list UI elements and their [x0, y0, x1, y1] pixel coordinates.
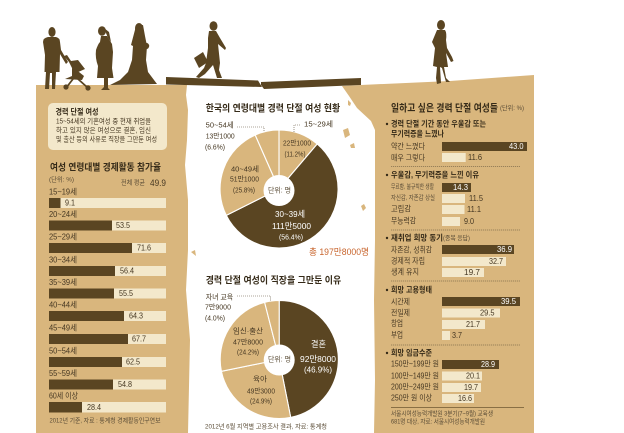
overall average: 49.9: [150, 178, 166, 188]
section: reasons for depression: [386, 170, 484, 226]
source note: 681명 대상, 자료: 서울시여성능력개발원: [391, 416, 485, 426]
section: reasons for depression: 11.5: [469, 194, 484, 203]
section: desired wage: 200만~249만 원: [391, 382, 439, 392]
label: 30-39: 30~39세: [275, 209, 305, 219]
section: felt depression: 무기력증을 느꼈나: [391, 128, 445, 138]
section: desired employment type: 3.7: [452, 331, 462, 340]
heading: status by age: 한국의 연령대별 경력 단절 여성 현황: [206, 102, 340, 114]
section: desired wage: 희망 임금수준: [391, 348, 433, 358]
section: desired wage: 250만 원 이상: [391, 392, 433, 402]
bar chart: age groups: 9.1: [65, 198, 75, 208]
bar chart: age groups: 28.4: [87, 403, 101, 412]
bar chart: age groups: 45~49세: [49, 324, 77, 332]
section: desired employment type: 부업: [391, 330, 403, 340]
section: reasons for depression: 자신감, 자존감 상실: [391, 192, 435, 202]
section: desired wage: [386, 348, 499, 403]
bar chart: age groups: 67.7: [132, 334, 146, 344]
section: reasons for depression: 무능력감: [391, 216, 417, 226]
panel: female economic participation by age: [49, 162, 166, 424]
panel: career-break women by age: [205, 102, 369, 257]
bar chart: age groups: 55.5: [119, 289, 133, 298]
bar chart: age groups: 55~59세: [49, 369, 77, 378]
leader line: [237, 296, 270, 301]
bar chart: age groups: 15~19세: [49, 188, 77, 196]
section: motivation to rejoin: 32.7: [489, 257, 503, 266]
section: felt depression: 11.6: [468, 153, 483, 162]
label: child education: [205, 292, 233, 322]
label: 30-39: [272, 209, 311, 242]
bar chart: age groups: 30~34세: [49, 256, 77, 264]
section: motivation to rejoin: (중복 응답): [443, 234, 470, 242]
label: pregnancy and birth: 47만8000: [233, 338, 263, 346]
label: childcare: 49만3000: [247, 386, 275, 396]
label: 50-54: 13만1000: [206, 132, 235, 140]
section: felt depression: [386, 118, 527, 162]
icon: bride silhouette: [110, 23, 157, 85]
label: 30-39: (56.4%): [279, 232, 303, 242]
label: 30-39: 111만5000: [272, 221, 311, 231]
label: childcare: 육아: [253, 374, 267, 384]
source note: 2012년 기준, 자료 : 통계청 경제활동인구연보: [50, 416, 161, 424]
section: desired wage: 150만~199만 원: [391, 360, 439, 368]
label: 40-49: (25.8%): [233, 186, 255, 194]
overall average: 전체 평균: [121, 178, 145, 186]
bar chart: age groups: 25~29세: [49, 232, 77, 242]
bar chart: age groups: 53.5: [116, 221, 130, 230]
definition text: 및 출산 등의 사유로 직장을 그만둔 여성: [56, 134, 157, 144]
background: left ground panel: [36, 85, 190, 433]
section: desired employment type: 희망 고용형태: [391, 284, 432, 294]
bar chart: age groups: 20~24세: [49, 210, 77, 219]
label: marriage: [300, 339, 336, 374]
section: felt depression: 약간 느꼈다: [391, 141, 426, 151]
section: desired wage: 19.7: [464, 383, 478, 392]
section: felt depression: 경력 단절 기간 동안 우울감 또는: [391, 118, 487, 128]
section: motivation to rejoin: [386, 232, 514, 277]
label: 40-49: 40~49세: [231, 164, 259, 174]
section: desired wage: 100만~149만 원: [391, 372, 439, 380]
label: 40-49: [230, 164, 259, 194]
label: child education: 7만9000: [205, 302, 231, 312]
bar chart: age groups: 64.3: [129, 312, 143, 320]
bar chart: age groups: 50~54세: [49, 346, 77, 356]
heading: want to work: 일하고 싶은 경력 단절 여성들: [391, 102, 498, 114]
section: desired employment type: 29.5: [480, 308, 495, 318]
heading: reasons: 경력 단절 여성이 직장을 그만둔 이유: [206, 274, 341, 286]
section: felt depression: 매우 그렇다: [391, 152, 426, 162]
definition text: [56, 116, 157, 144]
bar chart: age groups: 35~39세: [49, 278, 77, 287]
bar chart: age groups: 71.6: [137, 244, 151, 252]
section: reasons for depression: 11.1: [467, 205, 482, 214]
source note: 서울시여성능력개발원 3분기(7~9월) 교육생: [391, 408, 493, 418]
section: reasons for depression: 9.0: [464, 217, 474, 226]
section: felt depression: 43.0: [509, 142, 524, 151]
section: desired employment type: 전일제: [391, 308, 410, 318]
section: reasons for depression: 우울감, 무기력증을 느낀 이유: [391, 170, 480, 180]
section: motivation to rejoin: 생계 유지: [391, 266, 419, 276]
unit label: (단위: %): [49, 174, 74, 184]
label: child education: (4.0%): [205, 314, 225, 322]
section: motivation to rejoin: 경제적 자립: [391, 256, 425, 266]
label: 15-29: (11.2%): [284, 150, 306, 158]
icon: pregnant woman silhouette: [96, 26, 114, 90]
source note: 2012년 6월 지역별 고용조사 결과, 자료: 통계청: [205, 422, 327, 430]
label: 15-29: 15~29세: [304, 120, 333, 128]
definition text: 하고 있지 않은 여성으로 결혼, 임신: [56, 126, 151, 134]
label: pregnancy and birth: 임신·출산: [233, 326, 263, 336]
label: 15-29: 22만1000: [283, 138, 311, 148]
label: childcare: [247, 374, 275, 406]
section: desired wage: 16.6: [458, 394, 472, 403]
section: desired wage: 20.1: [466, 372, 480, 380]
total callout: 총 197만8000명: [309, 247, 369, 257]
section: desired employment type: 창업: [391, 319, 403, 328]
label: 15-29: [283, 120, 333, 158]
unit label: (단위: %): [500, 103, 524, 112]
section: desired wage: 28.9: [481, 360, 495, 369]
silhouettes: life stages: [43, 20, 454, 91]
label: pregnancy and birth: (24.2%): [237, 348, 259, 356]
section: reasons for depression: 14.3: [453, 183, 469, 192]
overall average: [121, 178, 166, 188]
label: 40-49: 51만1000: [230, 174, 259, 184]
section: desired employment type: 시간제: [391, 296, 410, 306]
bar chart: age groups: 62.5: [126, 358, 140, 366]
label: 50-54: [205, 120, 235, 152]
section: reasons for depression: 고립감: [391, 204, 412, 214]
bar chart: age groups: 40~44세: [49, 300, 77, 310]
panel: women who want to work: [386, 102, 527, 426]
heading: participation rate: 여성 연령대별 경제활동 참가율: [50, 162, 161, 174]
section: reasons for depression: 무료함, 불규칙한 생활: [391, 182, 434, 190]
bar chart: age groups: 54.8: [118, 380, 132, 389]
section: motivation to rejoin: 재취업 희망 동기: [391, 232, 443, 242]
pie chart: reasons: [220, 300, 338, 419]
bar chart: age groups: [49, 188, 166, 412]
definition box: [48, 103, 167, 150]
label: 50-54: (6.6%): [205, 142, 225, 152]
section: desired employment type: 39.5: [501, 297, 517, 306]
label: childcare: (24.9%): [250, 396, 272, 406]
section: motivation to rejoin: 19.7: [464, 268, 481, 277]
label: pregnancy and birth: [233, 326, 263, 356]
definition heading: 경력 단절 여성: [56, 106, 98, 116]
background: right ground panel: [191, 75, 534, 433]
label: marriage: 결혼: [311, 339, 326, 349]
label: child education: 자녀 교육: [206, 292, 233, 302]
label: marriage: (46.9%): [304, 366, 332, 374]
label: marriage: 92만8000: [300, 354, 336, 364]
panel: reasons for leaving work: [205, 274, 341, 430]
icon: stroller: [63, 55, 91, 91]
broken plank: [166, 77, 361, 89]
section: motivation to rejoin: 자존감, 성취감: [391, 244, 433, 254]
section: desired employment type: [386, 284, 520, 340]
center label: 단위: 명: [268, 354, 291, 364]
bar chart: age groups: 60세 이상: [49, 390, 79, 400]
icon: walking woman with bag: [194, 21, 226, 78]
label: 50-54: 50~54세: [206, 120, 234, 130]
bar chart: age groups: 56.4: [120, 266, 134, 276]
section: motivation to rejoin: 36.9: [497, 245, 513, 254]
pie chart: age distribution: [220, 130, 338, 248]
leader lines: [237, 125, 300, 133]
icon: parent silhouette: [43, 27, 68, 89]
section: desired employment type: 21.7: [466, 320, 480, 329]
definition text: 15~54세의 기혼여성 중 현재 취업을: [56, 116, 151, 125]
center label: 단위: 명: [268, 186, 291, 194]
icon: standing woman: [432, 20, 454, 84]
source note: [391, 408, 493, 426]
